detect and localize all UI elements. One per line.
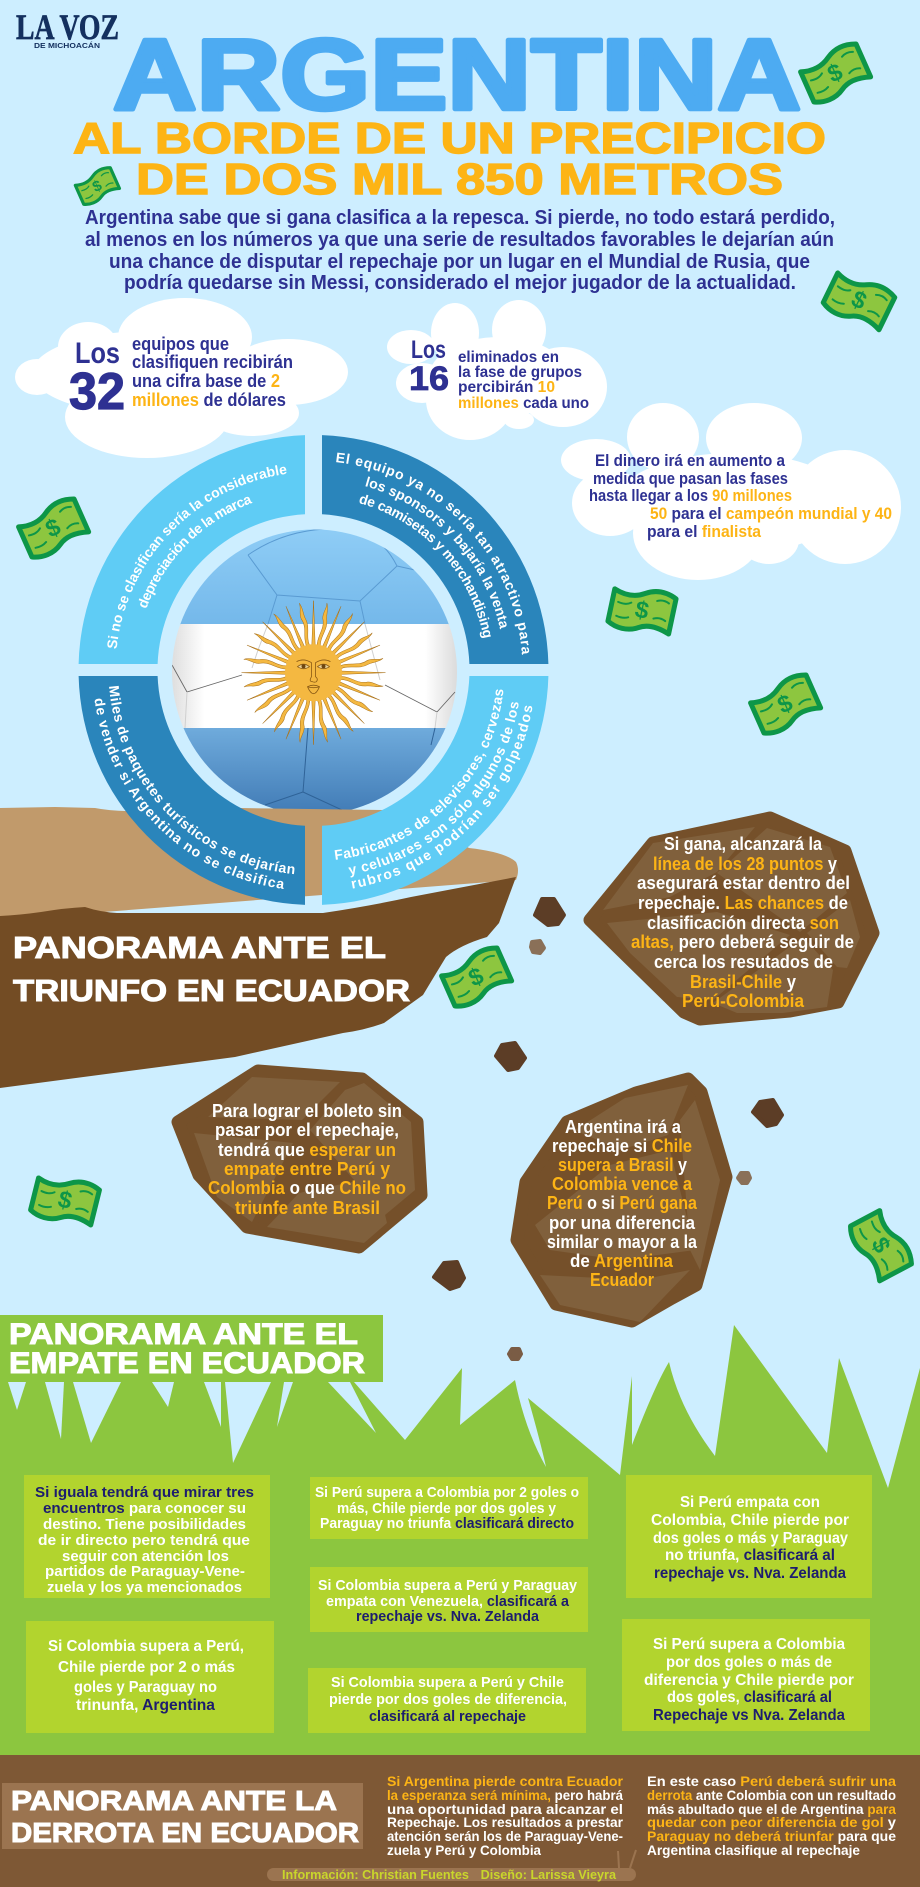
ring segment: brand depreciation: depreciación de la marca bbox=[138, 496, 252, 608]
rock: repechage: repechaje si Chile bbox=[552, 1135, 692, 1156]
football with Argentine flag bbox=[170, 528, 460, 818]
heading: draw scenario bbox=[0, 1315, 383, 1382]
rock: repechage: supera a Brasil y bbox=[558, 1154, 688, 1175]
panel: if they draw: zuela y los ya mencionados bbox=[47, 1579, 242, 1596]
rock: repechage: Argentina irá a bbox=[565, 1116, 682, 1137]
panel: if they draw: encuentros para conocer su bbox=[43, 1500, 246, 1517]
panel: if they draw: seguir con atención los bbox=[62, 1548, 229, 1565]
rock: direct ticket: triunfe ante Brasil bbox=[235, 1197, 380, 1218]
panel: Peru beats Colombia by two: por dos goles o más de bbox=[666, 1654, 832, 1671]
panel: Chile loses by two: Si Colombia supera a Perú y Chile bbox=[331, 1674, 564, 1691]
bill: centre right: $ bbox=[633, 596, 652, 625]
heading: loss scenario: PANORAMA ANTE LA bbox=[11, 1785, 337, 1816]
text block: loss column 1: atención serán los de Paraguay-Vene- bbox=[387, 1828, 623, 1844]
cloud: 16 eliminated bbox=[387, 300, 607, 440]
rock: direct ticket: empate entre Perú y bbox=[224, 1158, 391, 1179]
panel: direct qualification: Paraguay no triunfa clasificará directo bbox=[320, 1515, 574, 1532]
rock: repechage: Ecuador bbox=[590, 1269, 654, 1290]
text block: loss column 2: Paraguay no deberá triunfar para que bbox=[647, 1828, 896, 1844]
text block: loss column 1 bbox=[387, 1773, 624, 1858]
panel: Peru draws Colombia: Si Perú empata con bbox=[680, 1494, 820, 1511]
cloud: 32 teams: Los bbox=[75, 337, 120, 370]
text block: loss column 1: Repechaje. Los resultados a prestar bbox=[387, 1814, 624, 1830]
bill: subtitle left bbox=[74, 166, 121, 207]
bill: right: $ bbox=[774, 689, 797, 720]
ring segment: manufacturers bbox=[322, 676, 548, 905]
cloud: 16 eliminated: 16 bbox=[409, 360, 449, 398]
footer credits: Información: Christian Fuentes Diseño: Larissa Vieyra bbox=[282, 1867, 617, 1882]
panel: if they draw bbox=[24, 1475, 270, 1598]
rock: repechage: de Argentina bbox=[570, 1250, 674, 1271]
panel: Chile loses by two: pierde por dos goles de diferencia, bbox=[329, 1691, 567, 1708]
text block: loss column 1: Si Argentina pierde contra Ecuador bbox=[387, 1773, 624, 1789]
rock: repechage: Perú o si Perú gana bbox=[547, 1192, 698, 1213]
rock: if they win: Brasil-Chile y bbox=[690, 971, 797, 992]
text block: loss column 1: zuela y Perú y Colombia bbox=[387, 1842, 541, 1858]
bill: intro right bbox=[821, 267, 896, 333]
cloud: 32 teams: 32 bbox=[69, 363, 125, 421]
heading: loss scenario: DERROTA EN ECUADOR bbox=[11, 1817, 359, 1848]
bill: subtitle left: $ bbox=[90, 177, 105, 196]
panel: Paraguay draws Venezuela: empata con Venezuela, clasificará a bbox=[326, 1593, 570, 1610]
bill: intro right: $ bbox=[847, 285, 871, 316]
heading: win scenario: TRIUNFO EN ECUADOR bbox=[13, 973, 410, 1008]
intro paragraph: una chance de disputar el repechaje por un lugar en el Mundial de Rusia, que bbox=[109, 251, 810, 273]
cloud: 32 teams: millones de dólares bbox=[132, 390, 286, 410]
bill: ring left: $ bbox=[42, 513, 65, 544]
rock: if they win: altas, pero deberá seguir de bbox=[631, 931, 854, 952]
panel: Chile loses by two: clasificará al repechaje bbox=[369, 1708, 526, 1725]
rock: direct ticket: pasar por el repechaje, bbox=[215, 1119, 399, 1140]
ring segment: manufacturers: rubros que podrían ser golpeados bbox=[352, 706, 532, 888]
rock: if they win: repechaje. Las chances de bbox=[638, 892, 848, 913]
ring segment: sponsors: de camisetas y merchandising bbox=[360, 494, 491, 638]
bill: top right: $ bbox=[824, 58, 847, 89]
cliff body (dark brown) bbox=[0, 877, 516, 1088]
cloud: prize money bbox=[561, 403, 901, 580]
panel: if they draw: Si iguala tendrá que mirar tres bbox=[35, 1484, 254, 1501]
bill: top right bbox=[798, 41, 872, 106]
panel: Peru beats Colombia by two bbox=[622, 1619, 870, 1731]
panel: Colombia beats Peru: Si Colombia supera a Perú, bbox=[48, 1638, 244, 1655]
cloud: prize money: para el finalista bbox=[647, 522, 761, 541]
rock: small debris bbox=[434, 899, 782, 1359]
panel: if they draw: partidos de Paraguay-Vene- bbox=[45, 1563, 245, 1580]
panel: Peru beats Colombia by two: dos goles, clasificará al bbox=[667, 1689, 832, 1706]
rock: if they win bbox=[590, 818, 873, 1019]
rock: direct ticket: Colombia o que Chile no bbox=[208, 1177, 406, 1198]
ring segment: manufacturers: Fabricantes de televisores, cervezas bbox=[334, 689, 504, 860]
panel: Peru draws Colombia: no triunfa, clasificará al bbox=[665, 1547, 835, 1564]
cloud: 32 teams: clasifiquen recibirán bbox=[132, 352, 293, 372]
panel: Chile loses by two bbox=[308, 1668, 586, 1733]
rock: if they win: cerca los resutados de bbox=[654, 951, 833, 972]
panel: Colombia beats Peru: goles y Paraguay no bbox=[74, 1679, 217, 1696]
rock: if they win: asegurará estar dentro del bbox=[637, 872, 850, 893]
ring segment: sponsors: los sponsors y bajaría la venta bbox=[365, 476, 507, 630]
cloud: 16 eliminated: millones cada uno bbox=[458, 395, 589, 412]
ring segment: brand depreciation: Si no se clasifican sería la considerable bbox=[107, 465, 286, 649]
text block: loss column 2: En este caso Perú deberá sufrir una bbox=[647, 1773, 896, 1789]
bill: lower right bbox=[847, 1207, 915, 1283]
bill: right bbox=[748, 672, 822, 737]
intro paragraph: Argentina sabe que si gana clasifica a la repesca. Si pierde, no todo estará perdido, bbox=[85, 207, 835, 229]
panel: if they draw: destino. Tiene posibilidades bbox=[43, 1516, 246, 1533]
cloud: prize money: 50 para el campeón mundial y 40 bbox=[650, 504, 892, 523]
panel: direct qualification bbox=[310, 1477, 588, 1539]
panel: Paraguay draws Venezuela: Si Colombia supera a Perú y Paraguay bbox=[318, 1577, 578, 1594]
cloud: 16 eliminated: Los bbox=[411, 336, 446, 364]
cloud: 16 eliminated: la fase de grupos bbox=[458, 364, 582, 381]
text block: loss column 1: una oportunidad para alcanzar el bbox=[387, 1801, 623, 1817]
footer credits bbox=[267, 1850, 636, 1882]
rock: direct ticket bbox=[178, 1071, 421, 1247]
rock: if they win: clasificación directa son bbox=[647, 912, 839, 933]
title: ARGENTINA bbox=[113, 19, 801, 131]
panel: Peru beats Colombia by two: Si Perú supera a Colombia bbox=[653, 1636, 845, 1653]
cloud: prize money: El dinero irá en aumento a bbox=[595, 451, 785, 470]
rock: direct ticket: tendrá que esperar un bbox=[218, 1139, 396, 1160]
bill: cliff edge bbox=[439, 945, 513, 1010]
text block: loss column 2 bbox=[647, 1773, 896, 1858]
rock: if they win: Si gana, alcanzará la bbox=[664, 833, 823, 854]
panel: Peru beats Colombia by two: diferencia y Chile pierde por bbox=[644, 1672, 854, 1689]
panel: Colombia beats Peru bbox=[26, 1621, 274, 1733]
panel: direct qualification: Si Perú supera a Colombia por 2 goles o bbox=[315, 1484, 579, 1501]
text block: loss column 2: quedar con peor diferencia de gol y bbox=[647, 1814, 896, 1830]
cloud: 32 teams: una cifra base de 2 bbox=[132, 371, 280, 391]
panel: Colombia beats Peru: Chile pierde por 2 o más bbox=[58, 1659, 235, 1676]
cloud: 32 teams: equipos que bbox=[132, 334, 229, 354]
logo: La Voz de Michoacán: LA VOZ bbox=[16, 7, 119, 47]
heading: draw scenario: EMPATE EN ECUADOR bbox=[9, 1347, 365, 1380]
panel: Colombia beats Peru: trinunfa, Argentina bbox=[76, 1697, 215, 1714]
bill: centre right bbox=[607, 582, 677, 638]
intro paragraph bbox=[85, 207, 835, 294]
ring segment: tourism packages: de vender si Argentina no se clasifica bbox=[94, 698, 284, 889]
bill: lower right: $ bbox=[866, 1233, 896, 1258]
text block: loss column 2: más abultado que el de Argentina para bbox=[647, 1801, 896, 1817]
bill: cliff edge: $ bbox=[465, 962, 488, 993]
text block: loss column 1: la esperanza será mínima, pero habrá bbox=[387, 1787, 623, 1803]
subtitle bbox=[73, 114, 826, 204]
rock: repechage bbox=[517, 1079, 726, 1322]
cloud: 32 teams bbox=[15, 298, 348, 458]
rock: repechage: similar o mayor a la bbox=[547, 1231, 698, 1252]
bottom band bbox=[0, 1755, 920, 1887]
panel: Peru draws Colombia: Colombia, Chile pierde por bbox=[651, 1512, 849, 1529]
text block: loss column 2: Argentina clasifique al repechaje bbox=[647, 1842, 860, 1858]
panel: Paraguay draws Venezuela bbox=[310, 1567, 588, 1632]
bill: lower left bbox=[30, 1172, 100, 1229]
panel: Peru draws Colombia: dos goles o más y Paraguay bbox=[653, 1530, 848, 1547]
cliff top (tan) bbox=[0, 807, 518, 920]
bill: ring left bbox=[16, 496, 90, 561]
text block: loss column 2: derrota ante Colombia con un resultado bbox=[647, 1787, 896, 1803]
panel: Peru draws Colombia bbox=[626, 1475, 872, 1598]
panel: if they draw: de ir directo pero tendrá que bbox=[38, 1532, 250, 1549]
cloud: 16 eliminated: eliminados en bbox=[458, 349, 559, 366]
heading: loss scenario bbox=[2, 1783, 363, 1849]
cloud: prize money: medida que pasan las fases bbox=[593, 469, 788, 488]
ring segment: manufacturers: y celulares son sólo algunos de los bbox=[348, 702, 518, 878]
rock: repechage: por una diferencia bbox=[549, 1212, 696, 1233]
panel: Peru draws Colombia: repechaje vs. Nva. Zelanda bbox=[654, 1565, 846, 1582]
rock: if they win: Perú-Colombia bbox=[682, 990, 805, 1011]
rock: repechage: Colombia vence a bbox=[552, 1173, 693, 1194]
cloud: 16 eliminated: percibirán 10 bbox=[458, 379, 555, 396]
intro paragraph: podría quedarse sin Messi, considerado el mejor jugador de la actualidad. bbox=[124, 272, 796, 294]
subtitle: AL BORDE DE UN PRECIPICIO bbox=[73, 114, 826, 163]
bill: lower left: $ bbox=[55, 1186, 75, 1215]
cloud: prize money: hasta llegar a los 90 millones bbox=[589, 486, 792, 505]
intro paragraph: al menos en los números ya que una serie de resultados favorables le dejarían aún bbox=[85, 229, 834, 251]
grass gaps bbox=[8, 1382, 376, 1463]
heading: win scenario: PANORAMA ANTE EL bbox=[13, 930, 386, 965]
panel: Paraguay draws Venezuela: repechaje vs. Nva. Zelanda bbox=[356, 1608, 540, 1625]
ring segment: tourism packages: Miles de paquetes turísticos se dejarían bbox=[109, 686, 294, 874]
subtitle: DE DOS MIL 850 METROS bbox=[136, 155, 783, 204]
heading: win scenario bbox=[13, 930, 410, 1008]
grass field bbox=[0, 1325, 920, 1760]
rock: if they win: línea de los 28 puntos y bbox=[653, 853, 838, 874]
ring segment: sponsors: El equipo ya no sería tan atractivo para bbox=[336, 452, 530, 655]
panel: Peru beats Colombia by two: Repechaje vs Nva. Zelanda bbox=[653, 1707, 845, 1724]
logo: La Voz de Michoacán: DE MICHOACÁN bbox=[34, 41, 100, 50]
rock: direct ticket: Para lograr el boleto sin bbox=[212, 1100, 402, 1121]
panel: direct qualification: más, Chile pierde por dos goles y bbox=[337, 1500, 557, 1517]
sun of May bbox=[242, 601, 386, 745]
heading: draw scenario: PANORAMA ANTE EL bbox=[9, 1318, 358, 1351]
ring segment: brand depreciation bbox=[78, 435, 305, 664]
